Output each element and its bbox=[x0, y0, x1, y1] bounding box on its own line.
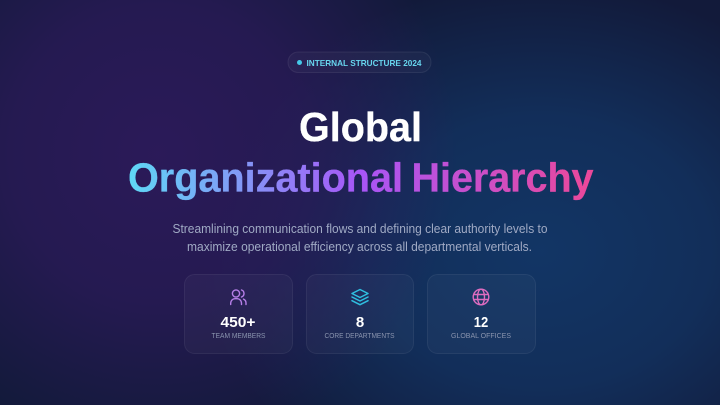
icon: users bbox=[231, 290, 246, 304]
label: team members: TEAM MEMBERS bbox=[212, 331, 266, 340]
badge: internal structure 2024: INTERNAL STRUCTURE 2024 bbox=[306, 58, 422, 68]
title: Organizational bbox=[128, 154, 403, 200]
label: global offices: GLOBAL OFFICES bbox=[451, 331, 511, 340]
badge: internal structure 2024 bbox=[288, 52, 431, 72]
icon: globe bbox=[473, 289, 489, 305]
subtitle bbox=[172, 222, 548, 254]
label: core departments: CORE DEPARTMENTS bbox=[324, 331, 394, 340]
value: 8: 8 bbox=[356, 314, 364, 331]
value: 12: 12 bbox=[474, 314, 488, 331]
title: Hierarchy bbox=[412, 154, 594, 200]
value: 450+: 450+ bbox=[220, 314, 256, 331]
title bbox=[128, 104, 594, 200]
stat card: global offices bbox=[428, 274, 536, 354]
stat card: core departments bbox=[306, 274, 414, 354]
subtitle: Streamlining communication flows and defining clear authority levels to bbox=[172, 222, 548, 236]
title: Global bbox=[299, 104, 422, 150]
stat card: team members bbox=[184, 274, 292, 354]
icon: layers bbox=[352, 290, 368, 305]
subtitle: maximize operational efficiency across all departmental verticals. bbox=[187, 240, 532, 254]
